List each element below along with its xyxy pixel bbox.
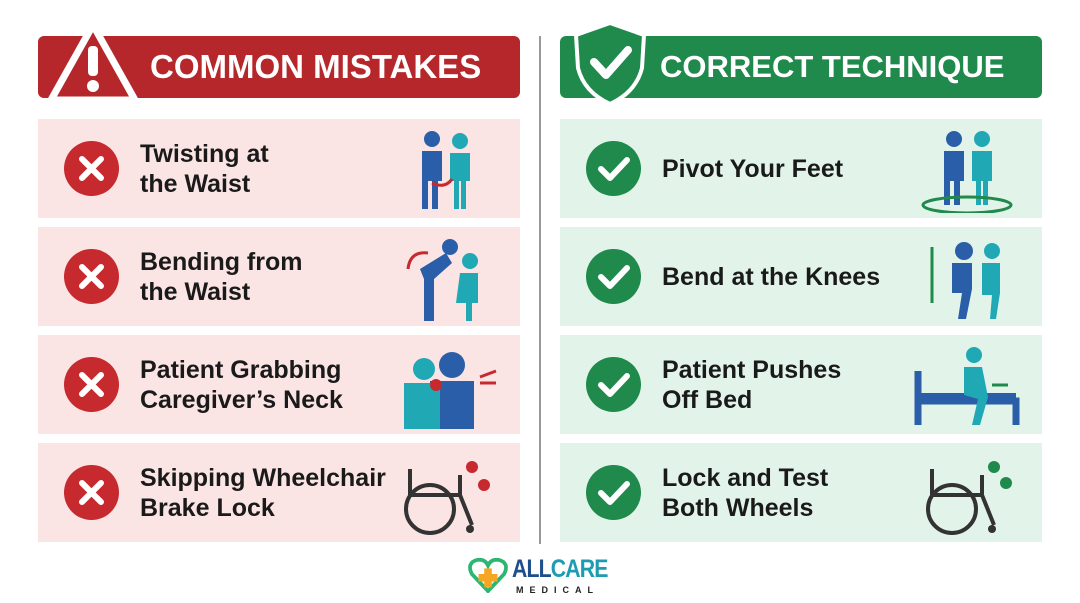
row: twisting: the Waist xyxy=(140,170,250,198)
logo: allcare medical: MEDICAL xyxy=(516,585,599,595)
header: common mistakes: COMMON MISTAKES xyxy=(150,48,481,85)
row: bending: Bending from xyxy=(140,248,302,276)
row: lock wheels: Lock and Test xyxy=(662,464,828,492)
row: pivot: Pivot Your Feet xyxy=(662,155,843,183)
logo: allcare medical: ALLCARE xyxy=(512,555,608,583)
icon: warning triangle xyxy=(48,32,138,98)
header: common mistakes xyxy=(38,36,520,98)
row: brake: Skipping Wheelchair xyxy=(140,464,386,492)
logo: allcare medical xyxy=(468,555,608,595)
row: grabbing neck xyxy=(38,335,520,434)
row: bend knees xyxy=(560,227,1042,326)
row: brake: Brake Lock xyxy=(140,494,275,522)
header: correct technique: CORRECT TECHNIQUE xyxy=(660,49,1004,84)
row: grabbing neck: Patient Grabbing xyxy=(140,356,341,384)
header: correct technique xyxy=(560,36,1042,98)
row: bending: the Waist xyxy=(140,278,250,306)
row: pushes off bed: Off Bed xyxy=(662,386,752,414)
row: grabbing neck: Caregiver’s Neck xyxy=(140,386,343,414)
row: brake xyxy=(38,443,520,542)
row: lock wheels xyxy=(560,443,1042,542)
row: pivot xyxy=(560,119,1042,218)
row: twisting xyxy=(38,119,520,218)
row: bend knees: Bend at the Knees xyxy=(662,263,880,291)
row: twisting: Twisting at xyxy=(140,140,269,168)
row: pushes off bed: Patient Pushes xyxy=(662,356,841,384)
icon: shield check xyxy=(574,25,646,102)
row: pushes off bed xyxy=(560,335,1042,434)
row: bending xyxy=(38,227,520,326)
divider xyxy=(539,36,541,544)
row: lock wheels: Both Wheels xyxy=(662,494,813,522)
